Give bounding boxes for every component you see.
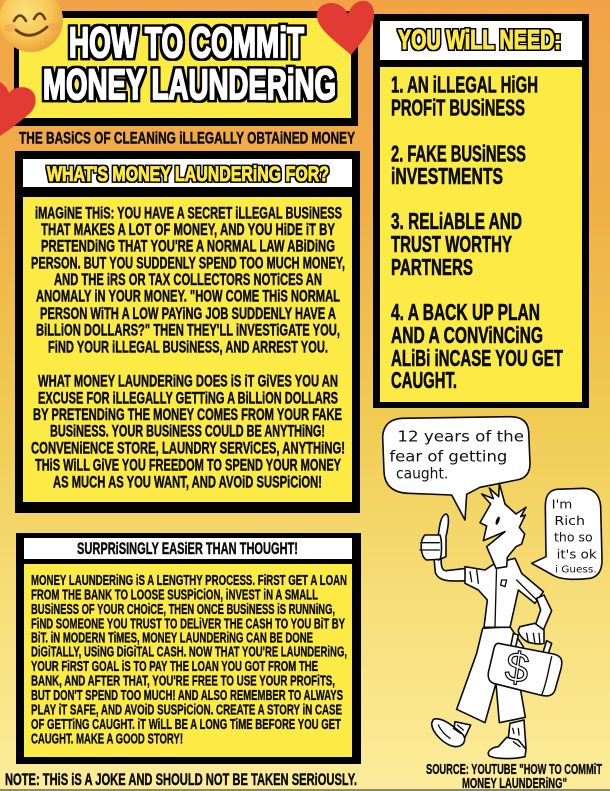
text block: second paragraph: EXCUSE FOR iLLEGALLY GETTiNG A BiLLiON DOLLARS bbox=[38, 389, 338, 407]
text block: first paragraph: iMAGiNE THiS: YOU HAVE A SECRET iLLEGAL BUSiNESS bbox=[35, 204, 342, 222]
text block: process description: FiND SOMEONE YOU TRUST TO DELiVER THE CASH TO YOU BiT BY bbox=[31, 616, 345, 632]
text block: first paragraph: AND THE iRS OR TAX COLLECTORS NOTiCES AN bbox=[54, 271, 322, 289]
text block: process description: BANK, AND AFTER THAT, YOU'RE FREE TO USE YOUR PROFiTS, bbox=[31, 674, 335, 690]
title bbox=[43, 19, 336, 109]
text block: second paragraph bbox=[31, 373, 345, 491]
text block: process description: DiGiTALLY, USiNG DiGiTAL CASH. NOW THAT YOU'RE LAUNDERiNG, bbox=[31, 645, 347, 661]
text block: second paragraph: CONVENiENCE STORE, LAUNDRY SERViCES, ANYTHiNG! bbox=[31, 439, 345, 457]
text block: second paragraph: BY PRETENDiNG THE MONEY COMES FROM YOUR FAKE bbox=[33, 406, 342, 424]
list item 1: PROFiT BUSiNESS bbox=[391, 95, 525, 121]
text block: first paragraph: PRETENDiNG THAT YOU'RE A NORMAL LAW ABiDiNG bbox=[41, 238, 335, 256]
list item 3: PARTNERS bbox=[391, 254, 473, 280]
text block: process description: FROM THE BANK TO LOOSE SUSPiCiON, iNVEST iN A SMALL bbox=[31, 587, 318, 603]
title: MONEY LAUNDERiNG bbox=[43, 61, 336, 109]
text block: second paragraph: THiS WiLL GiVE YOU FREEDOM TO SPEND YOUR MONEY bbox=[35, 457, 341, 475]
panel: surprisingly easier than thought bbox=[16, 533, 361, 764]
character: raised arm with thumbs up bbox=[420, 514, 467, 581]
character: shirt bbox=[465, 558, 543, 627]
text block: second paragraph: BUSiNESS. YOUR BUSiNESS COULD BE ANYTHiNG! bbox=[50, 423, 325, 441]
character: right shoe and sock bbox=[488, 720, 526, 759]
heading: surprisingly easier than thought: SURPRiSINGLY EASiER THAN THOUGHT! bbox=[77, 540, 298, 558]
text block: process description: PLAY iT SAFE, AND AVOiD SUSPiCiON. CREATE A STORY iN CASE bbox=[31, 702, 342, 718]
speech bubble: I'm rich: tho so bbox=[554, 531, 593, 545]
text block: process description: BUSiNESS OF YOUR CHOiCE, THEN ONCE BUSiNESS iS RUNNiNG, bbox=[31, 602, 335, 618]
text block: first paragraph: ANOMALY iN YOUR MONEY. "HOW COME THiS NORMAL bbox=[36, 288, 340, 306]
text block: first paragraph: FiND YOUR iLLEGAL BUSiNESS, AND ARREST YOU. bbox=[48, 338, 328, 356]
panel: title bbox=[14, 11, 358, 126]
list item 4 bbox=[391, 299, 563, 393]
list item 3: 3. RELiABLE AND bbox=[391, 208, 522, 234]
speech bubble: I'm rich: Rich bbox=[554, 513, 585, 528]
text block: first paragraph: BiLLiON DOLLARS?" THEN THEY'LL iNVESTiGATE YOU, bbox=[36, 322, 340, 340]
source credit bbox=[426, 762, 602, 791]
panel: what's money laundering for bbox=[15, 151, 360, 513]
character: left shoe and sock bbox=[432, 719, 471, 747]
speech bubble: I'm rich: I'm bbox=[552, 496, 572, 511]
list item 3 bbox=[391, 208, 522, 280]
list item 4: AND A CONViNCiNG bbox=[391, 322, 543, 348]
illustration: cartoon character with speech bubbles bbox=[383, 417, 602, 759]
title: HOW TO COMMiT bbox=[69, 19, 304, 67]
disclaimer note: NOTE: THiS iS A JOKE AND SHOULD NOT BE TAKEN SERiOUSLY. bbox=[5, 771, 357, 789]
list item 2: iNVESTMENTS bbox=[391, 163, 503, 189]
text block: process description: OF GETTiNG CAUGHT. iT WiLL BE A LONG TiME BEFORE YOU GET bbox=[31, 717, 341, 733]
list item 1 bbox=[391, 72, 538, 121]
panel: you will need bbox=[373, 14, 589, 408]
list item 4: CAUGHT. bbox=[391, 367, 457, 393]
character: trousers bbox=[457, 627, 525, 723]
list item 2: 2. FAKE BUSiNESS bbox=[391, 141, 526, 167]
character: right arm bbox=[535, 595, 552, 630]
text block: first paragraph: THAT MAKES A LOT OF MONEY, AND YOU HiDE iT BY bbox=[41, 221, 335, 239]
speech bubble: fear of getting caught bbox=[383, 417, 530, 520]
text block: process description bbox=[31, 573, 347, 747]
text block: second paragraph: WHAT MONEY LAUNDERiNG DOES iS iT GiVES YOU AN bbox=[38, 373, 338, 391]
speech bubble: fear of getting caught: fear of getting bbox=[389, 448, 507, 466]
text block: process description: MONEY LAUNDERiNG iS A LENGTHY PROCESS. FiRST GET A LOAN bbox=[31, 573, 347, 589]
list item 4: 4. A BACK UP PLAN bbox=[391, 299, 540, 325]
text block: second paragraph: AS MUCH AS YOU WANT, AND AVOiD SUSPiCiON! bbox=[53, 473, 322, 491]
speech bubble: I'm rich: i Guess. bbox=[555, 565, 597, 576]
text block: process description: YOUR FiRST GOAL iS TO PAY THE LOAN YOU GOT FROM THE bbox=[31, 659, 318, 675]
text block: process description: BUT DON'T SPEND TOO MUCH! AND ALSO REMEMBER TO ALWAYS bbox=[31, 688, 343, 704]
speech bubble: fear of getting caught: 12 years of the bbox=[397, 428, 524, 446]
icon: heart top right bbox=[317, 1, 374, 55]
list item 3: TRUST WORTHY bbox=[391, 231, 512, 257]
text block: process description: BiT. iN MODERN TiMES, MONEY LAUNDERiNG CAN BE DONE bbox=[31, 631, 313, 647]
briefcase with dollar sign: $ bbox=[503, 642, 532, 692]
icon: smiling emoji bbox=[0, 0, 63, 52]
heading: what's money laundering for: WHAT'S MONEY LAUNDERiNG FOR? bbox=[47, 163, 329, 186]
list item 2 bbox=[391, 141, 526, 189]
text block: first paragraph: PERSON WiTH A LOW PAYiNG JOB SUDDENLY HAVE A bbox=[40, 305, 336, 323]
text block: first paragraph: PERSON. BUT YOU SUDDENLY SPEND TOO MUCH MONEY, bbox=[31, 254, 345, 272]
subtitle: THE BASiCS OF CLEANiNG iLLEGALLY OBTAiNED MONEY bbox=[19, 130, 355, 148]
text block: process description: CAUGHT. MAKE A GOOD STORY! bbox=[31, 731, 183, 747]
briefcase with dollar sign bbox=[488, 633, 562, 696]
text block: first paragraph bbox=[31, 204, 345, 356]
character: hand on briefcase handle bbox=[518, 623, 544, 644]
icon: heart left bbox=[0, 82, 36, 136]
speech bubble: I'm rich: it's ok bbox=[557, 547, 597, 561]
speech bubble: I'm rich bbox=[532, 488, 602, 579]
speech bubble: fear of getting caught: caught. bbox=[396, 464, 448, 482]
character: head and hair bbox=[480, 483, 526, 568]
